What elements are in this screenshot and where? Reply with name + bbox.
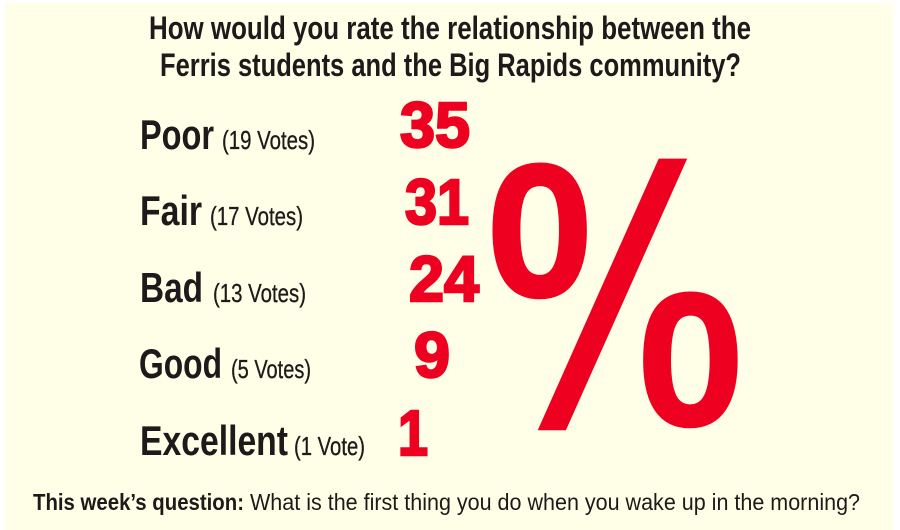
row: Bad: 24 — [409, 243, 479, 315]
row: Bad: Bad — [140, 264, 203, 311]
row: Fair: Fair — [140, 187, 202, 234]
row: Excellent: (1 Vote) — [294, 431, 365, 461]
row: Poor — [140, 89, 470, 161]
row: Good: Good — [139, 340, 222, 387]
row: Excellent: Excellent — [140, 417, 288, 464]
row: Excellent: 1 — [398, 397, 428, 469]
row: Good — [139, 319, 450, 391]
row: Fair — [140, 166, 469, 238]
title: Ferris students and the Big Rapids community? — [160, 47, 741, 83]
row: Poor: Poor — [140, 111, 214, 158]
large percent sign: % — [497, 81, 727, 506]
row: Good: 9 — [414, 319, 450, 391]
footer question: What is the first thing you do when you wake up in the morning? — [250, 489, 860, 515]
title — [149, 10, 751, 83]
row: Excellent — [140, 397, 428, 469]
large percent sign: % — [495, 156, 744, 485]
row: Fair: 31 — [405, 166, 469, 238]
row: Poor: (19 Votes) — [222, 125, 315, 155]
row: Bad — [140, 243, 479, 315]
row: Bad: (13 Votes) — [213, 278, 306, 308]
large percent sign: % — [486, 104, 735, 433]
row: Good: (5 Votes) — [231, 354, 311, 384]
row: Poor: 35 — [400, 89, 470, 161]
row: Fair: (17 Votes) — [210, 201, 303, 231]
footer question: This week’s question: — [33, 489, 244, 515]
title: How would you rate the relationship between the — [149, 10, 751, 46]
